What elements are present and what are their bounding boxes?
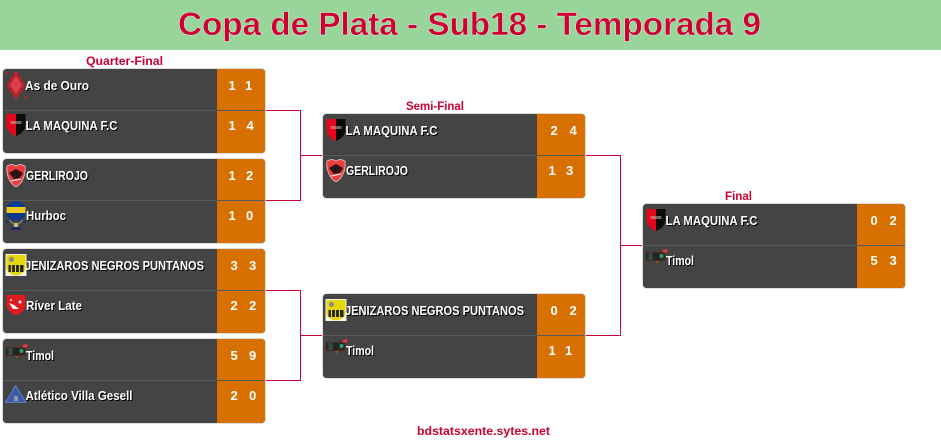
team: JENIZAROS NEGROS PUNTANOS: JENIZAROS NEGROS PUNTANOS [25,259,204,273]
scores: GERLIROJO: 3 [566,163,573,178]
team: Hurboc: Hurboc [26,209,66,223]
team: River Late: Ríver Late [26,299,82,313]
connector: quarter-finals 3-4 to semi-final 2 [265,290,322,380]
scores: Timol: 9 [249,348,256,363]
panel: quarter-final 3 [2,248,266,334]
icon: River Late crest [6,295,26,316]
team: JENIZAROS NEGROS PUNTANOS: JENIZAROS NEGROS PUNTANOS [345,304,524,318]
icon: Timol logo [326,339,348,354]
team: LA MAQUINA F.C: LA MAQUINA F.C [666,214,758,228]
heading: Quarter-Final: Quarter-Final [86,54,163,68]
scores: LA MAQUINA F.C: 4 [246,118,254,133]
connector: quarter-finals 1-2 to semi-final 1 [265,110,322,200]
team: Atletico Villa Gesell: Atlético Villa Gesell [26,389,132,403]
scores: GERLIROJO: 2 [246,168,253,183]
scores: River Late: 2 [230,298,238,313]
icon: LA MAQUINA crest [6,114,26,136]
scores: Atletico Villa Gesell: 2 [230,388,238,403]
scores: JENIZAROS NEGROS PUNTANOS: 3 [230,258,238,273]
icon: As de Ouro diamond [6,70,26,100]
icon: LA MAQUINA crest [326,119,346,141]
icon: JENIZAROS crest [6,254,26,276]
team: LA MAQUINA F.C: LA MAQUINA F.C [346,124,438,138]
scores: LA MAQUINA F.C: 2 [550,123,558,138]
scores: LA MAQUINA F.C: 0 [870,213,878,228]
icon: GERLIROJO crest [327,159,345,182]
scores: Timol: 5 [870,253,878,268]
icon: Timol logo [6,344,28,359]
heading: Semi-Final: Semi-Final [406,99,464,113]
scores: Timol: 1 [548,343,556,358]
icon: Atletico Villa Gesell triangle [6,386,26,402]
scores: Timol: 5 [230,348,238,363]
panel: final [642,204,906,288]
footer: site name: bdstatsxente.sytes.net [417,424,550,438]
icon: JENIZAROS crest [326,299,346,321]
icon: GERLIROJO crest [7,164,25,187]
scores: JENIZAROS NEGROS PUNTANOS: 3 [249,258,256,273]
panel: semi-final 1 [322,114,586,198]
heading: Final: Final [725,189,752,203]
team: Timol: Timol [666,254,694,268]
connector: semi-finals to final [585,156,642,336]
team: Timol: Timol [346,344,374,358]
scores: GERLIROJO: 1 [228,168,236,183]
scores: As de Ouro: 1 [245,78,252,93]
team: Timol: Timol [26,349,54,363]
icon: Timol logo [646,249,668,264]
scores: Timol: 1 [565,343,572,358]
team: GERLIROJO: GERLIROJO [26,169,88,183]
team: GERLIROJO: GERLIROJO [346,164,408,178]
scores: JENIZAROS NEGROS PUNTANOS: 2 [570,303,577,318]
scores: JENIZAROS NEGROS PUNTANOS: 0 [550,303,558,318]
scores: GERLIROJO: 1 [548,163,556,178]
scores: LA MAQUINA F.C: 4 [570,123,578,138]
team: As de Ouro: As de Ouro [25,79,89,93]
icon: LA MAQUINA crest [646,209,666,231]
icon: Hurboc balloon [6,201,26,230]
scores: Atletico Villa Gesell: 0 [249,388,256,403]
scores: LA MAQUINA F.C: 2 [890,213,897,228]
panel: quarter-final 1 [2,68,266,154]
panel: quarter-final 2 [2,158,266,244]
title banner [0,0,941,50]
scores: River Late: 2 [249,298,256,313]
panel: semi-final 2 [322,294,586,378]
team: LA MAQUINA F.C: LA MAQUINA F.C [26,119,118,133]
scores: Hurboc: 0 [246,208,253,223]
scores: As de Ouro: 1 [228,78,236,93]
scores: Hurboc: 1 [228,208,236,223]
scores: Timol: 3 [890,253,897,268]
panel: quarter-final 4 [2,338,266,424]
scores: LA MAQUINA F.C: 1 [228,118,236,133]
title banner: Copa de Plata - Sub18 - Temporada 9 [178,6,761,42]
